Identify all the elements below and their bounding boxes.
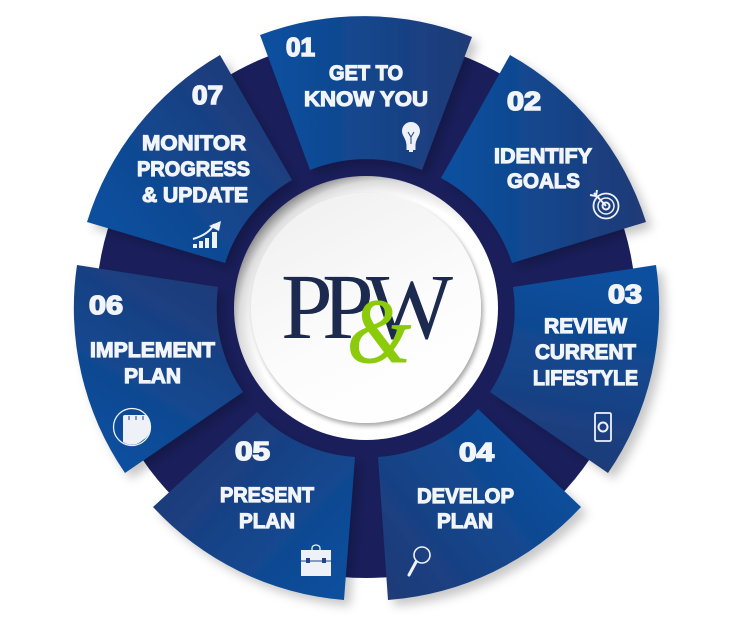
panel: 05 present plan: PLAN <box>239 510 295 533</box>
panel: 05 present plan <box>153 412 355 600</box>
panel: 06 implement plan <box>74 265 243 473</box>
panel: 07 monitor progress and update: 07 <box>192 80 223 110</box>
panel: 04 develop plan: DEVELOP <box>417 485 514 508</box>
panel: 04 develop plan <box>378 409 581 600</box>
panel: 06 implement plan: 06 <box>89 290 123 320</box>
icon: growth chart <box>193 221 221 248</box>
icon: phone <box>595 413 611 441</box>
icon: magnifier <box>409 547 430 575</box>
panel: 07 monitor progress and update: & UPDATE <box>142 184 248 207</box>
icon: target <box>590 190 618 218</box>
panel: 07 monitor progress and update: PROGRESS <box>137 158 250 181</box>
panel: 01 get to know you: 01 <box>286 32 315 62</box>
icon: briefcase <box>301 545 331 576</box>
panel: 06 implement plan: IMPLEMENT <box>90 339 215 362</box>
logo: PP&W <box>281 256 453 382</box>
panel: 07 monitor progress and update: MONITOR <box>142 132 246 155</box>
panel: 03 review current lifestyle <box>490 265 659 473</box>
icon: light bulb <box>402 122 420 152</box>
panel: 03 review current lifestyle: CURRENT <box>535 341 636 364</box>
panel: 03 review current lifestyle: LIFESTYLE <box>533 367 638 390</box>
panel: 01 get to know you: GET TO <box>329 62 403 85</box>
logo: PP&W: & <box>347 280 411 382</box>
panel: 02 identify goals: GOALS <box>507 170 580 193</box>
logo: PP&W: P <box>322 256 374 359</box>
panel: 03 review current lifestyle: REVIEW <box>544 315 627 338</box>
panel: 06 implement plan: PLAN <box>124 365 181 388</box>
panel: 02 identify goals <box>441 55 646 263</box>
panel: 02 identify goals: 02 <box>507 86 541 116</box>
panel: 05 present plan: 05 <box>235 436 270 466</box>
logo: PP&W: P <box>281 256 333 359</box>
panel: 03 review current lifestyle: 03 <box>608 279 642 309</box>
panel: 05 present plan: PRESENT <box>220 484 314 507</box>
panel: 01 get to know you <box>260 16 472 170</box>
panel: 04 develop plan: 04 <box>459 437 495 467</box>
base navy disc <box>96 38 636 578</box>
panel: 02 identify goals: IDENTIFY <box>494 145 592 168</box>
panel: 01 get to know you: KNOW YOU <box>304 88 428 111</box>
panel: 04 develop plan: PLAN <box>437 510 493 533</box>
center badge <box>234 176 498 440</box>
logo: PP&W: W <box>366 256 453 359</box>
panel: 07 monitor progress and update <box>87 55 292 263</box>
icon: notepad <box>114 408 151 446</box>
